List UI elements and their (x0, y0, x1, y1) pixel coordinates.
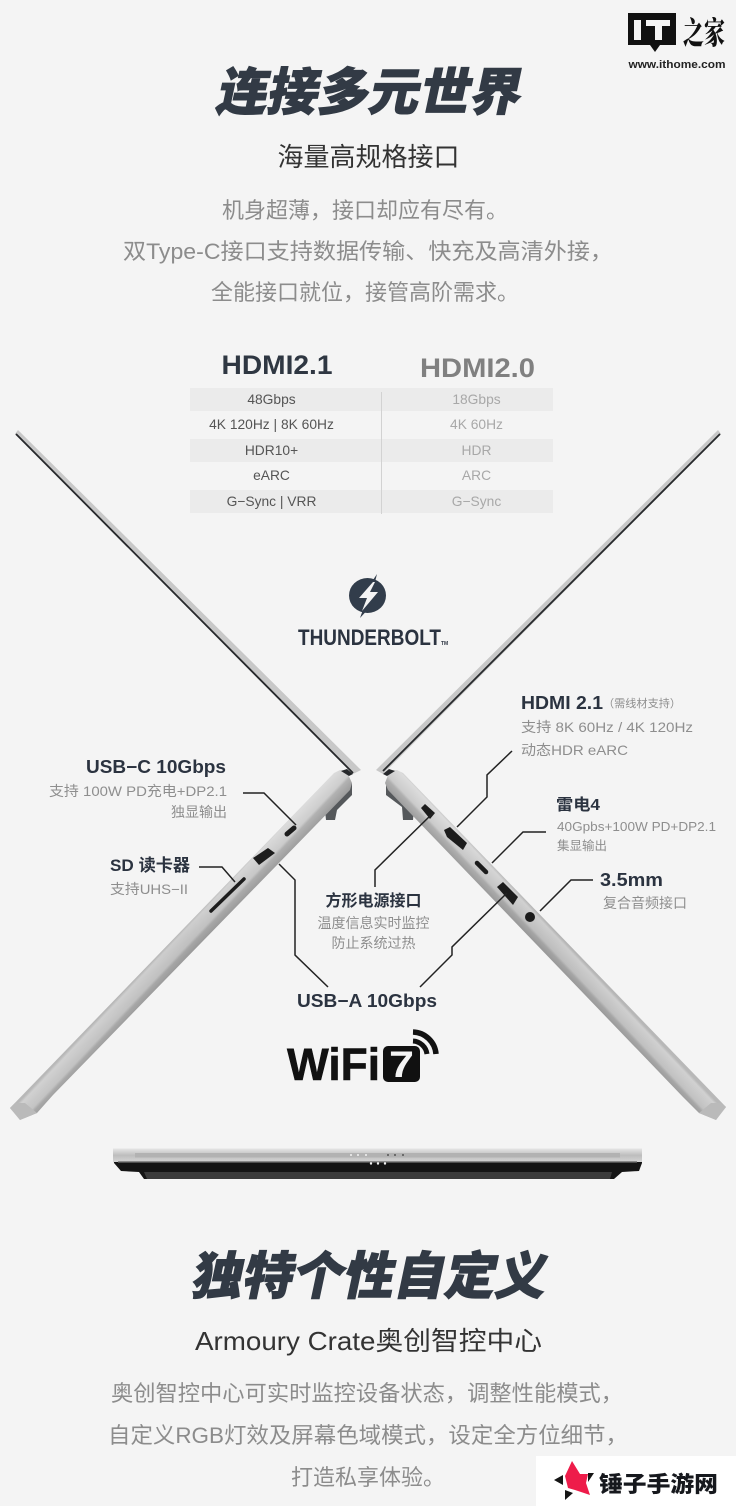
port: USB-A (253, 848, 275, 865)
callout: Thunderbolt 4: 集显输出 (557, 838, 607, 853)
HDMI2.0 values: HDR (462, 443, 491, 458)
logo: WiFi 7: 7 (389, 1044, 414, 1085)
title: 连接多元世界: 连接多元世界 (213, 64, 529, 121)
logo: IT home: www.ithome.com (627, 59, 726, 71)
heading: HDMI2.0: HDMI2.0 (420, 353, 535, 383)
port: square power (421, 804, 435, 819)
HDMI2.1 values: 4K 120Hz | 8K 60Hz (209, 417, 334, 432)
port: USB-A (497, 882, 518, 905)
callout: HDMI 2.1: 动态HDR eARC (521, 742, 628, 758)
callout: 3.5mm audio (540, 870, 687, 911)
callout: SD card reader: 支持UHS−II (110, 881, 188, 897)
HDMI2.0 values: G−Sync (452, 494, 501, 509)
body text block (108, 1381, 628, 1490)
body text block: 自定义RGB灯效及屏幕色域模式，设定全方位细节， (108, 1423, 628, 1448)
HDMI2.1 values: 48Gbps (247, 392, 296, 407)
logo: Thunderbolt: THUNDERBOLT (298, 625, 441, 650)
HDMI2.0 values: ARC (462, 468, 491, 483)
subtitle: 海量高规格接口: 海量高规格接口 (277, 142, 460, 172)
intro text block: 机身超薄，接口却应有尽有。 (222, 198, 508, 223)
HDMI2.1 values: HDR10+ (245, 443, 298, 458)
watermark: 锤子手游网: 锤子手游网 (599, 1472, 718, 1497)
HDMI2.1 values (209, 392, 334, 509)
intro text block: 双Type-C接口支持数据传输、快充及高清外接， (123, 239, 613, 264)
body text block: 奥创智控中心可实时监控设备状态，调整性能模式， (111, 1381, 623, 1406)
logo: Thunderbolt (298, 574, 448, 650)
HDMI2.0 values: 18Gbps (452, 392, 501, 407)
callout: USB-C 10Gbps: USB−C 10Gbps (86, 757, 226, 777)
callout: square power port: 方形电源接口 (325, 891, 422, 910)
watermark: 锤子手游网 (536, 1456, 736, 1506)
callout: USB-C 10Gbps: 独显输出 (171, 804, 227, 820)
port: Thunderbolt 4 (477, 863, 486, 872)
callout: USB-A 10Gbps (279, 864, 507, 1011)
callout: 3.5mm audio: 复合音频接口 (603, 895, 687, 911)
laptop: right, side view (376, 430, 726, 1120)
callout: USB-A 10Gbps: USB−A 10Gbps (297, 991, 437, 1011)
callout: 3.5mm audio: 3.5mm (600, 870, 663, 890)
callout: SD card reader (110, 856, 235, 897)
callout: USB-C 10Gbps (49, 757, 296, 825)
callout: Thunderbolt 4: 雷电4 (556, 796, 600, 814)
callout: HDMI 2.1: HDMI 2.1 (521, 693, 603, 713)
intro text block: 全能接口就位，接管高阶需求。 (211, 280, 519, 305)
title: 独特个性自定义: 独特个性自定义 (188, 1248, 554, 1305)
logo: Thunderbolt: TM (441, 641, 448, 647)
callout: square power port (318, 813, 433, 951)
logo: IT home (627, 8, 726, 71)
HDMI2.1 values: G−Sync | VRR (227, 494, 316, 509)
heading: HDMI2.1: HDMI2.1 (222, 350, 332, 380)
subtitle: Armoury Crate: Armoury Crate奥创智控中心 (195, 1326, 542, 1356)
HDMI2.0 values (450, 392, 503, 509)
body text block: 打造私享体验。 (291, 1465, 445, 1490)
callout: square power port: 温度信息实时监控 (318, 915, 430, 931)
callout: Thunderbolt 4 (492, 796, 716, 863)
callout: HDMI 2.1 (457, 693, 693, 827)
HDMI2.1 values: eARC (253, 468, 290, 483)
laptop: closed front view (113, 1148, 642, 1179)
intro text block (123, 198, 613, 305)
HDMI2.0 values: 4K 60Hz (450, 417, 503, 432)
port: USB-C (287, 828, 294, 834)
port: audio jack (525, 912, 535, 922)
callout: square power port: 防止系统过热 (332, 935, 416, 951)
callout: Thunderbolt 4: 40Gpbs+100W PD+DP2.1 (557, 819, 716, 834)
laptop: left, side view (10, 430, 361, 1120)
port: HDMI (444, 827, 467, 850)
callout: USB-C 10Gbps: 支持 100W PD充电+DP2.1 (49, 783, 227, 799)
panel: HDMI comparison table (190, 350, 553, 514)
logo: WiFi 7 (287, 1032, 436, 1090)
callout: HDMI 2.1: 支持 8K 60Hz / 4K 120Hz (521, 719, 693, 735)
port: SD slot (211, 879, 244, 911)
callout: HDMI 2.1: （需线材支持） (603, 696, 681, 710)
logo: WiFi 7: WiFi (287, 1039, 380, 1090)
callout: SD card reader: SD 读卡器 (110, 856, 190, 875)
indicator lights (350, 1154, 404, 1165)
